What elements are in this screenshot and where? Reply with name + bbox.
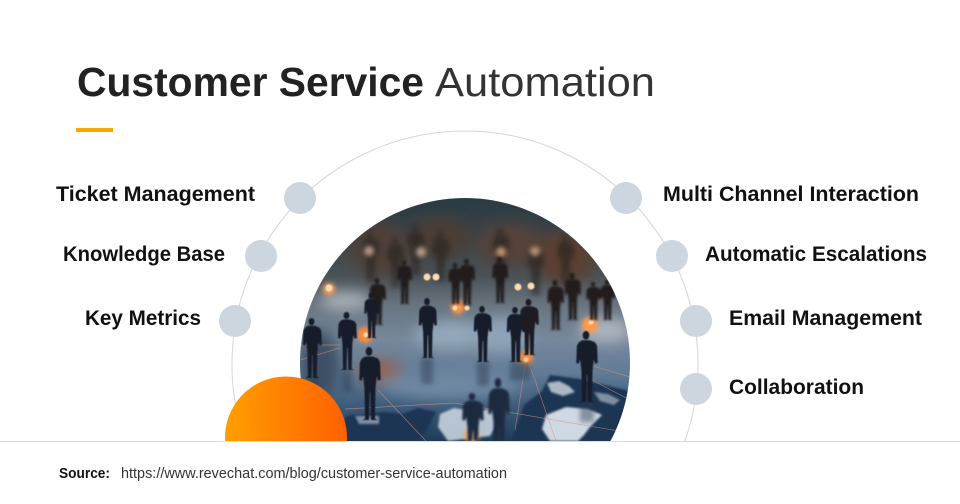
footer divider xyxy=(0,441,960,442)
orange light points xyxy=(323,246,598,443)
source line: Source: xyxy=(59,466,110,482)
left item: Key Metrics: Key Metrics xyxy=(85,307,201,330)
right item: Automatic Escalations xyxy=(656,240,927,272)
foreground figures xyxy=(303,293,598,420)
left item: Ticket Management: Ticket Management xyxy=(56,183,255,206)
left item: Ticket Management xyxy=(56,182,316,214)
left item: Knowledge Base xyxy=(63,240,277,272)
title xyxy=(77,59,655,105)
far blurred figures xyxy=(362,225,574,295)
left item: Knowledge Base: Knowledge Base xyxy=(63,243,225,266)
dark ocean shapes xyxy=(340,375,630,441)
title accent bar xyxy=(76,128,113,132)
network lines xyxy=(300,345,630,441)
right item: Multi Channel Interaction xyxy=(610,182,919,214)
title: Automation xyxy=(435,59,655,105)
right item: Collaboration xyxy=(680,373,864,405)
central photo: business people on a world map xyxy=(300,198,631,457)
right item: Collaboration: Collaboration xyxy=(729,376,864,399)
orbit ring xyxy=(232,131,698,441)
source line: https://www.revechat.com/blog/customer-service-automation xyxy=(121,466,507,482)
right item: Automatic Escalations: Automatic Escalations xyxy=(705,243,927,266)
right item: Email Management xyxy=(680,305,922,337)
blurred near figures xyxy=(460,376,512,441)
mid-ground figures xyxy=(370,257,615,330)
orange semicircle xyxy=(225,377,347,441)
right item: Multi Channel Interaction: Multi Channel Interaction xyxy=(663,183,919,206)
title: Customer Service xyxy=(77,59,424,105)
figure reflections xyxy=(307,358,594,422)
left item: Key Metrics xyxy=(85,305,251,337)
blurred background glow xyxy=(300,218,631,400)
map continents xyxy=(355,381,620,441)
right item: Email Management: Email Management xyxy=(729,307,922,330)
